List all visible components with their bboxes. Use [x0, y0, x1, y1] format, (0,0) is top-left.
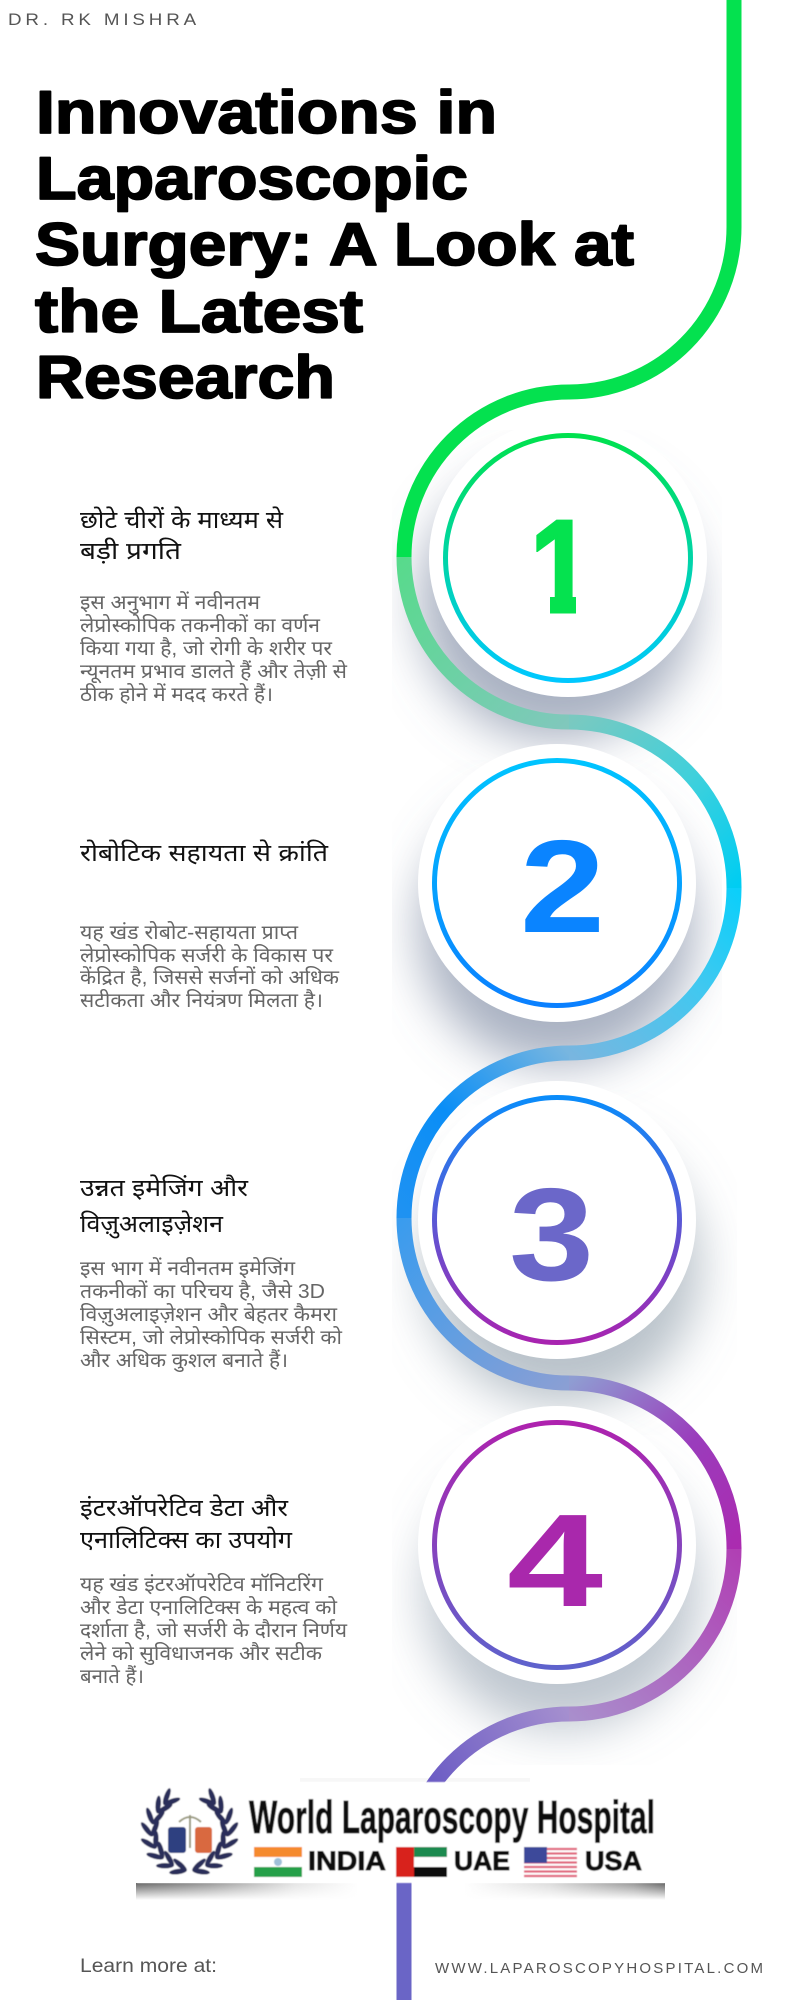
body 2: यह खंड रोबोट-सहायता प्राप्त [80, 920, 299, 944]
heading 3: विज़ुअलाइज़ेशन [80, 1210, 224, 1239]
disk shadows [419, 465, 700, 1730]
step 1 number badge: 1 [530, 493, 592, 640]
body 1: लेप्रोस्कोपिक तकनीकों का वर्णन [80, 613, 321, 637]
title: Innovations in [36, 79, 497, 146]
heading 3 [80, 1174, 249, 1239]
logo banner [137, 1782, 665, 1883]
heading 2: रोबोटिक सहायता से क्रांति [80, 839, 329, 867]
panel: step 2 text [80, 839, 340, 1012]
body 1: किया गया है, जो रोगी के शरीर पर [80, 635, 333, 660]
author name: DR. RK MISHRA [8, 10, 200, 29]
title: Research [36, 344, 335, 411]
body 2: केंद्रित है, जिससे सर्जनों को अधिक [80, 964, 340, 989]
heading 1: बड़ी प्रगति [80, 537, 183, 565]
body 3: और अधिक कुशल बनाते हैं। [80, 1348, 288, 1373]
label: INDIA: INDIA [308, 1846, 386, 1876]
title: Laparoscopic [36, 145, 468, 212]
body 1: इस अनुभाग में नवीनतम [80, 590, 261, 615]
heading 4: इंटरऑपरेटिव डेटा और [80, 1494, 289, 1522]
title: Surgery: A Look at [35, 211, 634, 278]
step 4 number badge: 4 [507, 1487, 603, 1634]
body 2: लेप्रोस्कोपिक सर्जरी के विकास पर [80, 943, 334, 967]
serpentine gradient line [404, 0, 734, 2000]
step 4 number badge [418, 1406, 696, 1684]
icon: UAE flag [396, 1847, 447, 1877]
body 4: और डेटा एनालिटिक्स के महत्व को [80, 1595, 338, 1619]
panel: step 4 text [80, 1494, 347, 1688]
body 4: लेने को सुविधाजनक और सटीक [80, 1641, 323, 1666]
heading 3: उन्नत इमेजिंग और [80, 1174, 249, 1202]
title [35, 79, 634, 411]
step 2 number badge: 2 [520, 813, 605, 960]
body 3 [80, 1256, 343, 1373]
heading 1: छोटे चीरों के माध्यम से [80, 506, 284, 534]
body 3: सिस्टम, जो लेप्रोस्कोपिक सर्जरी को [80, 1325, 343, 1349]
icon: laurel emblem [139, 1787, 240, 1875]
panel: step 3 text [80, 1174, 343, 1373]
step 1 number badge [429, 419, 707, 697]
body 1: न्यूनतम प्रभाव डालते हैं और तेज़ी से [80, 659, 347, 684]
title: the Latest [35, 278, 363, 345]
logo drop shadow [136, 1778, 665, 1900]
body 3: इस भाग में नवीनतम इमेजिंग [80, 1256, 296, 1280]
panel: step 1 text [80, 506, 347, 706]
heading 1 [80, 506, 284, 565]
label: UAE: UAE [454, 1846, 510, 1876]
step 3 number badge: 3 [509, 1161, 594, 1308]
body 4 [80, 1572, 347, 1688]
footer: website: WWW.LAPAROSCOPYHOSPITAL.COM [435, 1960, 763, 1977]
body 3: तकनीकों का परिचय है, जैसे 3D [80, 1278, 325, 1303]
body 1 [80, 590, 347, 706]
body 3: विज़ुअलाइज़ेशन और बेहतर कैमरा [80, 1301, 338, 1327]
body 4: बनाते हैं। [80, 1664, 144, 1688]
body 4: दर्शाता है, जो सर्जरी के दौरान निर्णय [80, 1617, 347, 1642]
body 2: सटीकता और नियंत्रण मिलता है। [80, 987, 323, 1012]
heading 4 [80, 1494, 293, 1554]
body 2 [80, 920, 340, 1012]
body 1: ठीक होने में मदद करते हैं। [80, 682, 273, 706]
step 2 number badge [418, 744, 696, 1022]
icon: India flag [254, 1847, 302, 1877]
icon: USA flag [524, 1847, 577, 1877]
step 3 number badge [418, 1081, 696, 1359]
heading 4: एनालिटिक्स का उपयोग [80, 1526, 293, 1554]
footer: learn more: Learn more at: [80, 1956, 217, 1977]
label: USA: USA [585, 1846, 642, 1876]
body 4: यह खंड इंटरऑपरेटिव मॉनिटरिंग [80, 1572, 324, 1596]
